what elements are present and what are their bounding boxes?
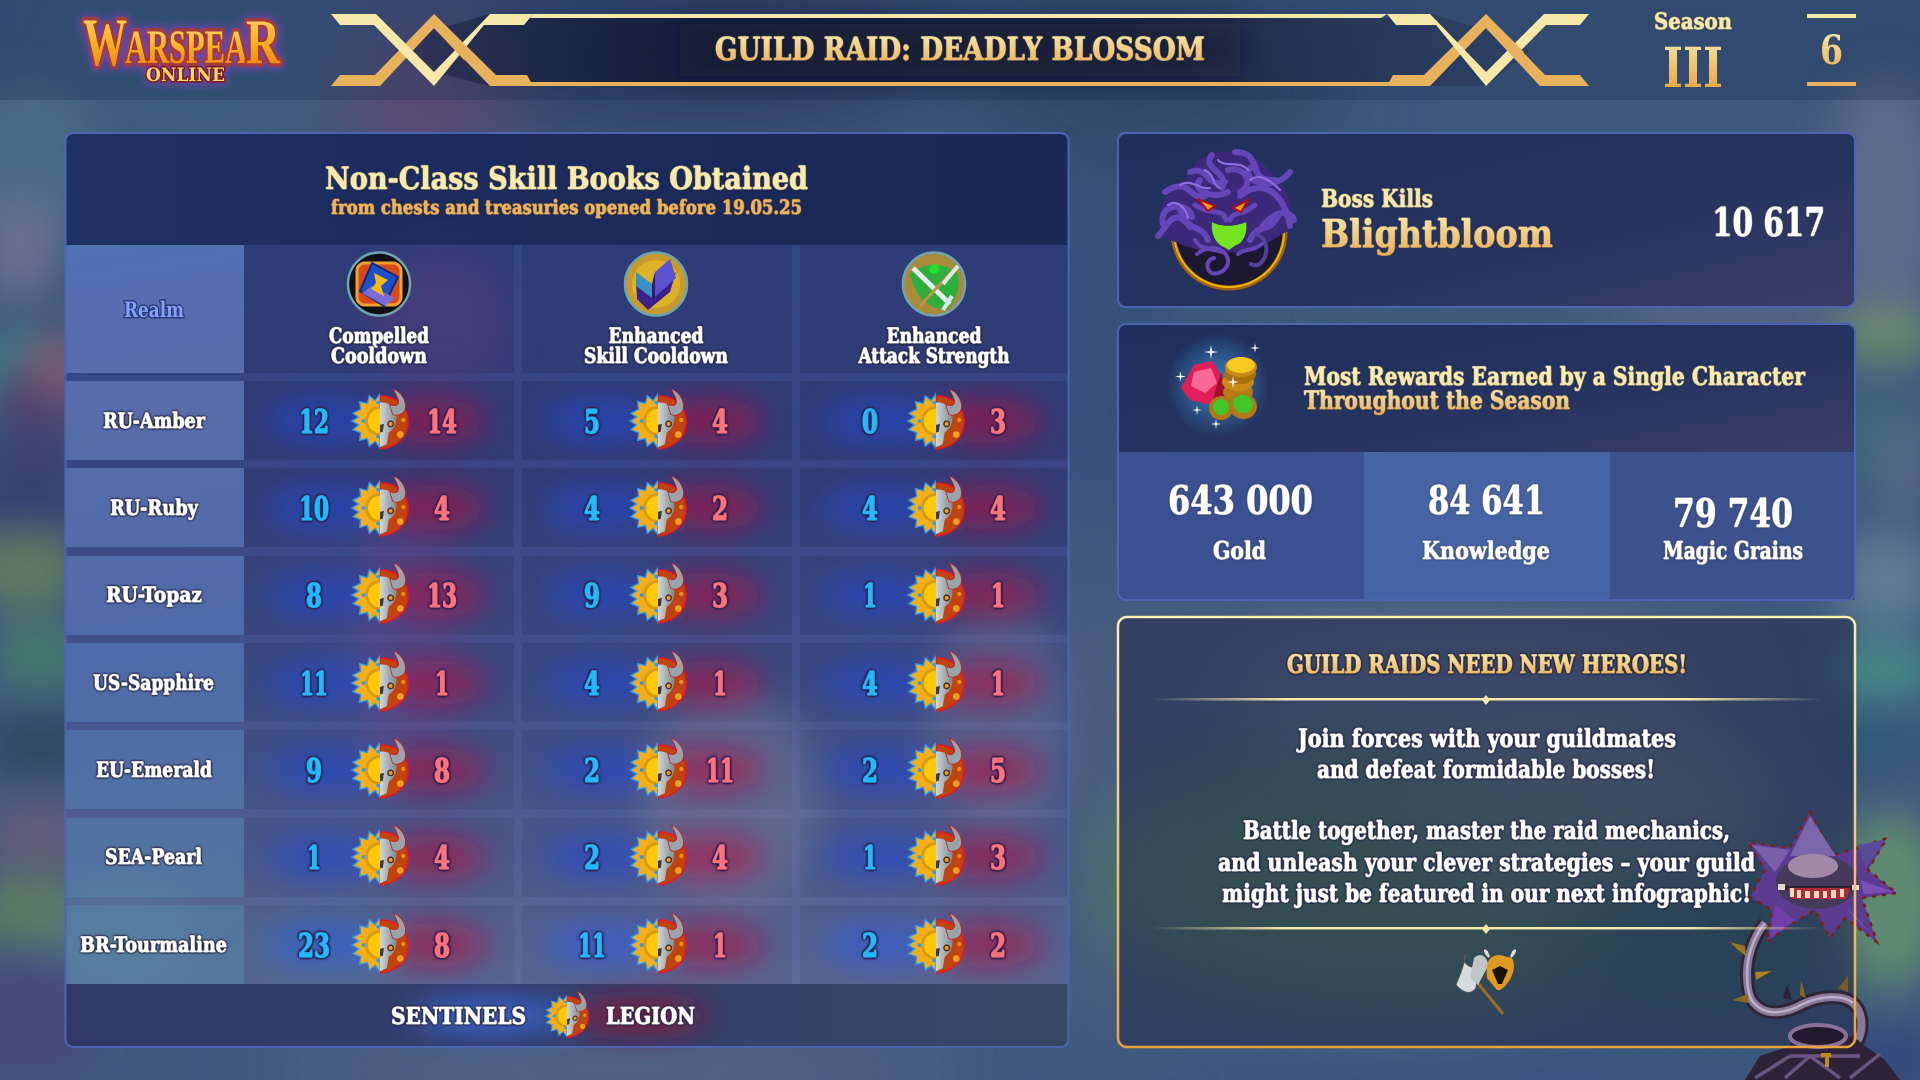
cell: SEA-Pearl Compelled Cooldown — [307, 825, 450, 885]
cell: SEA-Pearl Enhanced Attack Strength: 1 — [863, 838, 877, 877]
cell: BR-Tourmaline Enhanced Skill Cooldown — [578, 913, 727, 973]
week number — [1807, 14, 1856, 86]
table backdrop — [65, 245, 1068, 984]
logo: Warspear Online: W — [83, 4, 127, 80]
cell: RU-Topaz Compelled Cooldown: 8 — [306, 576, 322, 615]
boss kills value: 10 617 — [1712, 200, 1825, 246]
left panel border — [66, 133, 1068, 1047]
column header: Enhanced Attack Strength: Enhanced — [886, 323, 982, 348]
cell: BR-Tourmaline Enhanced Attack Strength: 2 — [862, 926, 878, 965]
icon: compelled cooldown book — [348, 252, 410, 316]
cell: RU-Topaz Enhanced Skill Cooldown: 9 — [584, 576, 600, 615]
cell: EU-Emerald Enhanced Attack Strength: 2 — [862, 751, 878, 790]
cell: RU-Ruby Enhanced Skill Cooldown — [584, 476, 728, 536]
cell: EU-Emerald Enhanced Skill Cooldown: 2 — [584, 751, 600, 790]
cell: BR-Tourmaline Compelled Cooldown: 23 — [298, 926, 330, 965]
divider top — [1152, 695, 1822, 705]
panel: Non-Class Skill Books table — [50, 133, 1070, 1047]
cell: RU-Ruby Compelled Cooldown: 10 — [299, 489, 329, 528]
cell: RU-Ruby Enhanced Skill Cooldown: 2 — [712, 489, 728, 528]
cell: SEA-Pearl Compelled Cooldown: 4 — [434, 838, 450, 877]
stat: Knowledge — [1364, 452, 1610, 600]
cell: BR-Tourmaline Compelled Cooldown: 8 — [434, 926, 450, 965]
stat: Gold — [1118, 452, 1364, 600]
boss name: Blightbloom — [1321, 211, 1553, 256]
column header: Enhanced Skill Cooldown: Skill Cooldown — [584, 343, 728, 368]
cell: RU-Topaz Enhanced Skill Cooldown: 3 — [712, 576, 728, 615]
icon: gem and coins — [1166, 333, 1270, 437]
rewards heading — [1304, 362, 1806, 415]
row: EU-Emerald: EU-Emerald — [96, 757, 212, 782]
cell: BR-Tourmaline Enhanced Attack Strength — [862, 913, 1006, 973]
cell: RU-Ruby Enhanced Attack Strength: 4 — [862, 489, 878, 528]
cell: RU-Ruby Compelled Cooldown — [299, 476, 450, 536]
row: RU-Amber — [103, 389, 1006, 449]
body text: and defeat formidable bosses! — [1317, 755, 1655, 784]
cell: SEA-Pearl Compelled Cooldown: 1 — [307, 838, 321, 877]
logo: Warspear Online — [83, 4, 281, 86]
top header band — [0, 0, 1920, 100]
panel: Guild raids need new heroes — [1118, 617, 1900, 1080]
stat: Magic Grains: Magic Grains — [1663, 536, 1803, 565]
row: RU-Amber: RU-Amber — [103, 408, 206, 433]
row: US-Sapphire: US-Sapphire — [93, 670, 214, 695]
week number: 6 — [1820, 27, 1843, 74]
cell: US-Sapphire Enhanced Attack Strength: 1 — [991, 664, 1005, 703]
panel header — [65, 133, 1068, 245]
cell: RU-Amber Compelled Cooldown: 12 — [299, 402, 329, 441]
cell: RU-Amber Compelled Cooldown: 14 — [427, 402, 457, 441]
logo: Warspear Online: ONLINE — [146, 64, 225, 86]
row: SEA-Pearl — [105, 825, 1006, 885]
panel: Boss Kills — [1118, 133, 1855, 307]
cell: BR-Tourmaline Enhanced Attack Strength: 2 — [990, 926, 1006, 965]
cell: SEA-Pearl Enhanced Attack Strength — [863, 825, 1006, 885]
table column header: Realm: Realm — [124, 297, 184, 322]
cell: US-Sapphire Enhanced Skill Cooldown: 4 — [584, 664, 600, 703]
illustration: carnivorous plant monster — [1730, 812, 1900, 1080]
cell: RU-Ruby Enhanced Attack Strength — [862, 476, 1006, 536]
stat: Gold: Gold — [1213, 536, 1266, 565]
callout heading: GUILD RAIDS NEED NEW HEROES! — [1287, 650, 1687, 679]
cell: BR-Tourmaline Compelled Cooldown — [298, 913, 450, 973]
column header: Compelled Cooldown: Cooldown — [331, 343, 427, 368]
cell: SEA-Pearl Enhanced Skill Cooldown: 2 — [584, 838, 600, 877]
logo: Warspear Online: ARSPEA — [125, 21, 247, 74]
icon: enhanced attack strength — [903, 252, 965, 316]
row: RU-Topaz — [106, 563, 1005, 623]
panel: Most Rewards — [1118, 324, 1855, 600]
cell: US-Sapphire Compelled Cooldown — [300, 651, 449, 711]
cell: US-Sapphire Enhanced Skill Cooldown: 1 — [713, 664, 727, 703]
cell: RU-Topaz Enhanced Attack Strength: 1 — [863, 576, 877, 615]
cell: EU-Emerald Enhanced Attack Strength: 5 — [990, 751, 1006, 790]
row: SEA-Pearl: SEA-Pearl — [105, 844, 202, 869]
row: EU-Emerald — [96, 738, 1006, 798]
rewards heading: Most Rewards Earned by a Single Character — [1304, 362, 1806, 391]
season block — [1654, 9, 1732, 100]
cell: RU-Ruby Compelled Cooldown: 4 — [434, 489, 450, 528]
cell: SEA-Pearl Enhanced Skill Cooldown: 4 — [712, 838, 728, 877]
cell: EU-Emerald Compelled Cooldown — [306, 738, 450, 798]
cell: EU-Emerald Enhanced Skill Cooldown: 11 — [706, 751, 734, 790]
cell: RU-Amber Enhanced Attack Strength — [862, 389, 1006, 449]
column header: Enhanced Skill Cooldown: Enhanced — [608, 323, 704, 348]
cell: US-Sapphire Compelled Cooldown: 11 — [300, 664, 328, 703]
cell: BR-Tourmaline Enhanced Skill Cooldown: 1 — [713, 926, 727, 965]
row: RU-Topaz: RU-Topaz — [106, 582, 202, 607]
cell: SEA-Pearl Enhanced Skill Cooldown — [584, 825, 728, 885]
rewards heading: Throughout the Season — [1304, 386, 1570, 415]
stat: Knowledge: 84 641 — [1428, 478, 1545, 524]
row: RU-Ruby: RU-Ruby — [110, 495, 199, 520]
row: BR-Tourmaline: BR-Tourmaline — [80, 932, 227, 957]
legend footer: Sentinels vs Legion: SENTINELS — [391, 1003, 526, 1030]
column header: Enhanced Skill Cooldown — [584, 252, 728, 368]
faction glows behind emblems — [267, 399, 1041, 967]
title text: GUILD RAID: DEADLY BLOSSOM — [715, 30, 1205, 68]
cell: RU-Ruby Enhanced Attack Strength: 4 — [990, 489, 1006, 528]
realm column cells — [65, 245, 244, 984]
icon: Blightbloom boss portrait — [1158, 152, 1294, 289]
cell: EU-Emerald Enhanced Skill Cooldown — [584, 738, 734, 798]
cell: EU-Emerald Enhanced Attack Strength — [862, 738, 1006, 798]
title banner — [331, 14, 1589, 86]
legend footer: Sentinels vs Legion — [65, 984, 1068, 1047]
icon: enhanced skill book — [625, 252, 687, 316]
cell: RU-Amber Compelled Cooldown — [299, 389, 457, 449]
legend footer: Sentinels vs Legion: LEGION — [606, 1003, 695, 1030]
cell: US-Sapphire Compelled Cooldown: 1 — [435, 664, 449, 703]
column header: Enhanced Attack Strength: Attack Strength — [858, 343, 1010, 368]
cell: RU-Amber Enhanced Attack Strength: 0 — [862, 402, 878, 441]
cell: EU-Emerald Compelled Cooldown: 9 — [306, 751, 322, 790]
body text: Join forces with your guildmates — [1296, 724, 1676, 753]
cell: RU-Ruby Enhanced Skill Cooldown: 4 — [584, 489, 600, 528]
logo: Warspear Online: R — [246, 6, 281, 77]
stat: Knowledge: Knowledge — [1422, 536, 1550, 565]
season block: Season — [1654, 9, 1732, 35]
stat: Magic Grains — [1610, 452, 1855, 600]
column header: Compelled Cooldown — [329, 252, 429, 368]
cell: RU-Topaz Enhanced Attack Strength — [863, 563, 1005, 623]
stat: Gold: 643 000 — [1168, 478, 1313, 524]
boss kills label: Boss Kills — [1321, 184, 1433, 213]
cell: RU-Amber Enhanced Attack Strength: 3 — [990, 402, 1006, 441]
cell: RU-Amber Enhanced Skill Cooldown: 5 — [584, 402, 600, 441]
divider bottom — [1152, 924, 1822, 934]
cell: EU-Emerald Compelled Cooldown: 8 — [434, 751, 450, 790]
body text — [1218, 724, 1755, 908]
column fill cells — [244, 245, 1068, 984]
cell: SEA-Pearl Enhanced Attack Strength: 3 — [990, 838, 1006, 877]
stat: Magic Grains: 79 740 — [1673, 491, 1793, 537]
cell: US-Sapphire Enhanced Attack Strength — [862, 651, 1005, 711]
row: BR-Tourmaline — [80, 913, 1006, 973]
row: RU-Ruby — [110, 476, 1006, 536]
season block: III — [1663, 35, 1723, 100]
body text: Battle together, master the raid mechanics, — [1243, 816, 1730, 845]
panel subtitle: from chests and treasuries opened before 19.05.25 — [331, 195, 802, 219]
column header: Enhanced Attack Strength — [858, 252, 1010, 368]
cell: RU-Topaz Enhanced Skill Cooldown — [584, 563, 728, 623]
cell: RU-Topaz Compelled Cooldown: 13 — [427, 576, 457, 615]
cell: US-Sapphire Enhanced Attack Strength: 4 — [862, 664, 878, 703]
left ornament — [331, 14, 533, 86]
body text: might just be featured in our next infographic! — [1222, 879, 1751, 908]
right ornament — [1387, 14, 1589, 86]
cell: RU-Amber Enhanced Skill Cooldown: 4 — [712, 402, 728, 441]
panel title: Non-Class Skill Books Obtained — [325, 161, 808, 197]
body text: and unleash your clever strategies – your guild — [1218, 848, 1755, 877]
row: US-Sapphire — [93, 651, 1005, 711]
callout border — [1118, 617, 1855, 1047]
cell: RU-Amber Enhanced Skill Cooldown — [584, 389, 728, 449]
icon: axe and helmet — [1456, 950, 1515, 1014]
cell: RU-Topaz Enhanced Attack Strength: 1 — [991, 576, 1005, 615]
column header: Compelled Cooldown: Compelled — [329, 323, 429, 348]
cell: US-Sapphire Enhanced Skill Cooldown — [584, 651, 727, 711]
cell: BR-Tourmaline Enhanced Skill Cooldown: 11 — [578, 926, 606, 965]
cell: RU-Topaz Compelled Cooldown — [306, 563, 457, 623]
